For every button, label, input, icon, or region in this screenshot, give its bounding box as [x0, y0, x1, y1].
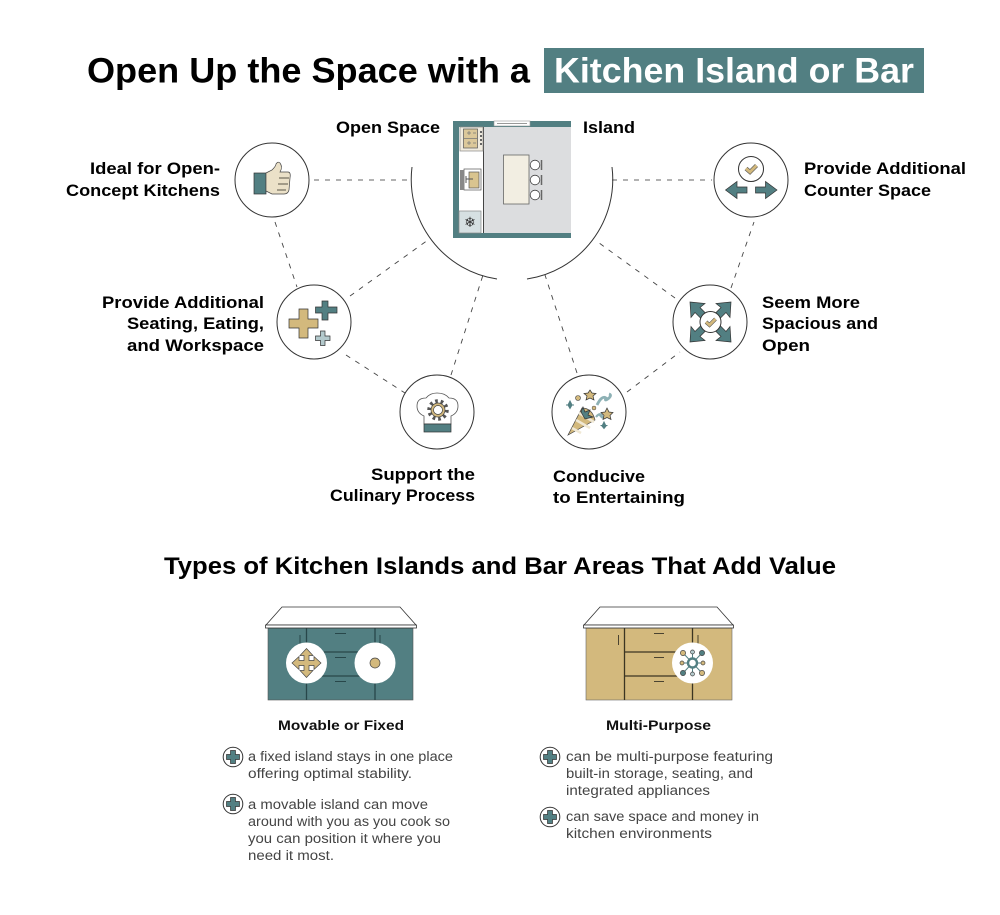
icon: four-way arrows	[292, 648, 321, 678]
icon: dot	[370, 658, 380, 668]
benefit: more spacious and open: Spacious and	[762, 315, 878, 333]
column: movable or fixed	[223, 718, 453, 863]
stove	[460, 127, 483, 151]
bullet icon	[540, 807, 560, 827]
island	[504, 155, 529, 204]
benefit: support the culinary process	[330, 375, 475, 505]
column: movable or fixed: you can position it where you	[248, 831, 441, 846]
benefit: seating, eating, workspace	[102, 285, 351, 359]
dashed connectors	[275, 180, 754, 393]
benefit: seating, eating, workspace: and Workspace	[127, 337, 264, 355]
benefit: conducive to entertaining: to Entertaining	[553, 489, 685, 507]
column: movable or fixed: Movable or Fixed	[278, 718, 404, 733]
column: multi-purpose: can save space and money in	[566, 809, 759, 824]
benefit: seating, eating, workspace: Seating, Eating,	[127, 315, 264, 333]
benefit: conducive to entertaining	[552, 375, 685, 507]
title: Kitchen Island or Bar	[554, 52, 914, 90]
benefit: more spacious and open: Open	[762, 337, 810, 355]
benefit: seating, eating, workspace: Provide Additional	[102, 294, 264, 312]
refrigerator: ❄	[464, 215, 476, 231]
arc around floor plan	[411, 167, 613, 279]
title: Open Up the Space with a	[87, 52, 531, 90]
benefit: conducive to entertaining: Conducive	[553, 468, 645, 486]
illustration: multi-purpose island	[584, 607, 734, 700]
benefit: support the culinary process: Culinary Process	[330, 487, 475, 505]
benefit: open-concept kitchens	[66, 143, 309, 217]
column: movable or fixed: a movable island can move	[248, 797, 428, 812]
column: movable or fixed: around with you as you cook so	[248, 814, 450, 829]
column: multi-purpose: built-in storage, seating, and	[566, 766, 753, 781]
bullet icon	[540, 747, 560, 767]
column: multi-purpose: Multi-Purpose	[606, 718, 712, 733]
label: island: Island	[583, 119, 635, 137]
benefit: open-concept kitchens: Concept Kitchens	[66, 182, 220, 200]
bullet icon	[223, 747, 243, 767]
kitchen floor plan	[453, 121, 571, 238]
benefit: open-concept kitchens: Ideal for Open-	[90, 160, 220, 178]
column: movable or fixed: a fixed island stays in one place	[248, 749, 453, 764]
stools	[530, 160, 542, 200]
benefit: more spacious and open	[673, 285, 878, 359]
benefit: additional counter space: Provide Additional	[804, 160, 966, 178]
column: movable or fixed: offering optimal stability.	[248, 766, 412, 781]
window	[494, 121, 530, 126]
title	[87, 48, 924, 93]
icon: network hub	[680, 650, 705, 676]
bullet icon	[223, 794, 243, 814]
column: multi-purpose	[540, 718, 773, 841]
illustration: movable or fixed island	[266, 607, 416, 700]
benefit: additional counter space: Counter Space	[804, 182, 931, 200]
column: multi-purpose: kitchen environments	[566, 826, 712, 841]
column: multi-purpose: integrated appliances	[566, 783, 710, 798]
benefit: more spacious and open: Seem More	[762, 294, 860, 312]
column: multi-purpose: can be multi-purpose featuring	[566, 749, 773, 764]
label: open space: Open Space	[336, 119, 440, 137]
benefit: additional counter space	[714, 143, 966, 217]
benefit: support the culinary process: Support the	[371, 466, 475, 484]
section heading: Types of Kitchen Islands and Bar Areas That Add Value	[164, 553, 836, 580]
column: movable or fixed: need it most.	[248, 848, 334, 863]
sink	[460, 169, 481, 190]
